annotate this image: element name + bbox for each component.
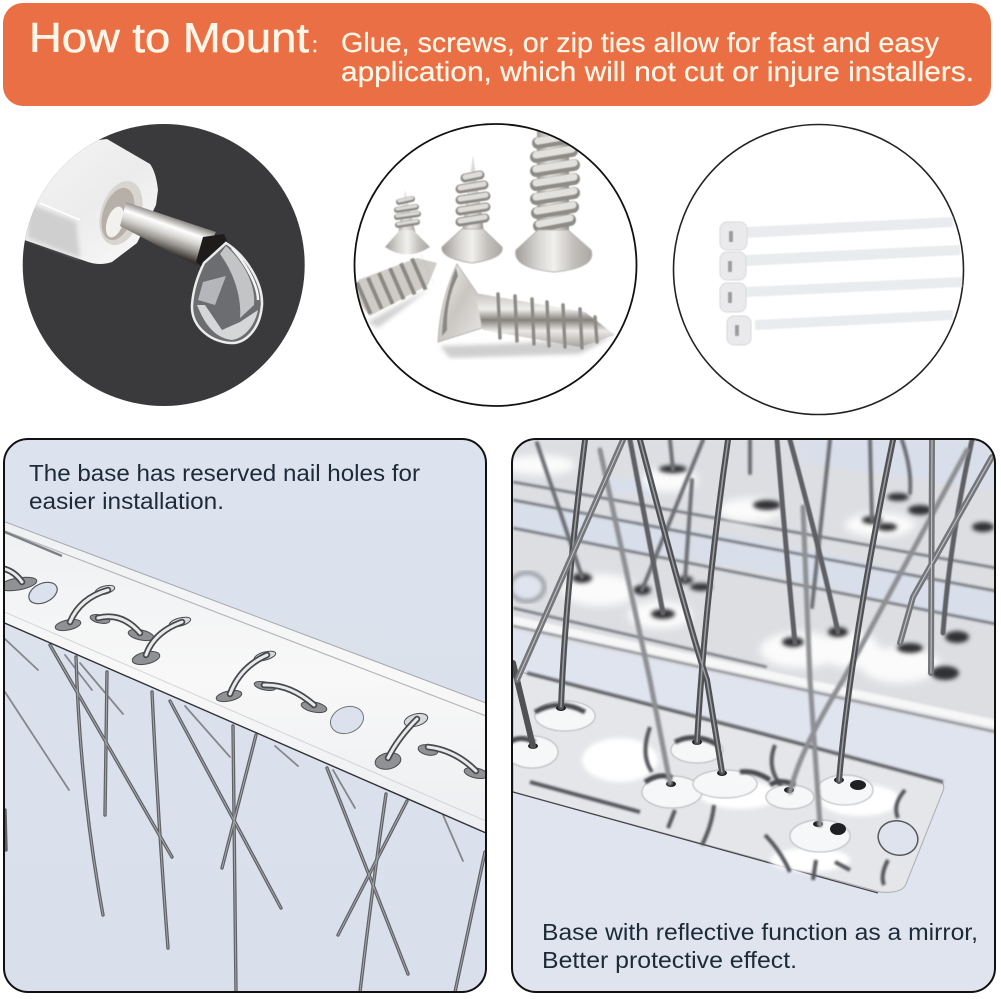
- caption: reflective base: Better protective effect.: [542, 947, 797, 973]
- blurred hole in far strip: [510, 573, 544, 601]
- caption: nail holes: The base has reserved nail holes for: [29, 460, 420, 486]
- circle: zip ties: [674, 124, 964, 414]
- caption: nail holes: easier installation.: [29, 488, 224, 514]
- nail hole: [330, 706, 364, 734]
- screw: large upright: [516, 130, 592, 272]
- mounting hole: [877, 820, 919, 856]
- spike wires: [5, 639, 485, 992]
- description text: Glue, screws, or zip ties allow for fast and easy: [341, 27, 939, 58]
- caption: reflective base: Base with reflective function as a mirror,: [542, 919, 978, 945]
- header banner: [3, 3, 991, 106]
- spike wires: [513, 440, 992, 825]
- staples: [0, 569, 489, 780]
- circle: screws: [354, 124, 636, 406]
- panel: reflective base: [505, 439, 996, 992]
- screw: small upright: [385, 190, 430, 254]
- description text: application, which will not cut or injure installers.: [341, 56, 974, 87]
- zip tie 4: [727, 310, 953, 345]
- description text: [341, 27, 974, 87]
- heading: How to Mount: :: [312, 34, 318, 57]
- panel: nail holes: [0, 439, 489, 992]
- zip tie 3: [720, 277, 962, 312]
- screw: large lying: [438, 264, 615, 358]
- circle: glue nozzle: [10, 124, 305, 406]
- zip tie 1: [720, 217, 953, 250]
- far strips, out of focus: [512, 440, 996, 735]
- caption: reflective base: [542, 919, 978, 973]
- heading: How to Mount: How to Mount: [29, 14, 309, 61]
- screw: medium upright: [442, 155, 502, 263]
- dimples: [506, 701, 873, 852]
- mounting strip: [0, 520, 489, 833]
- nail hole: [28, 582, 58, 604]
- icon: glue drop: [192, 243, 262, 343]
- screw: left lying: [357, 258, 437, 328]
- zip tie 2: [720, 245, 960, 280]
- caption: nail holes: [29, 460, 420, 514]
- front strip: [506, 670, 944, 893]
